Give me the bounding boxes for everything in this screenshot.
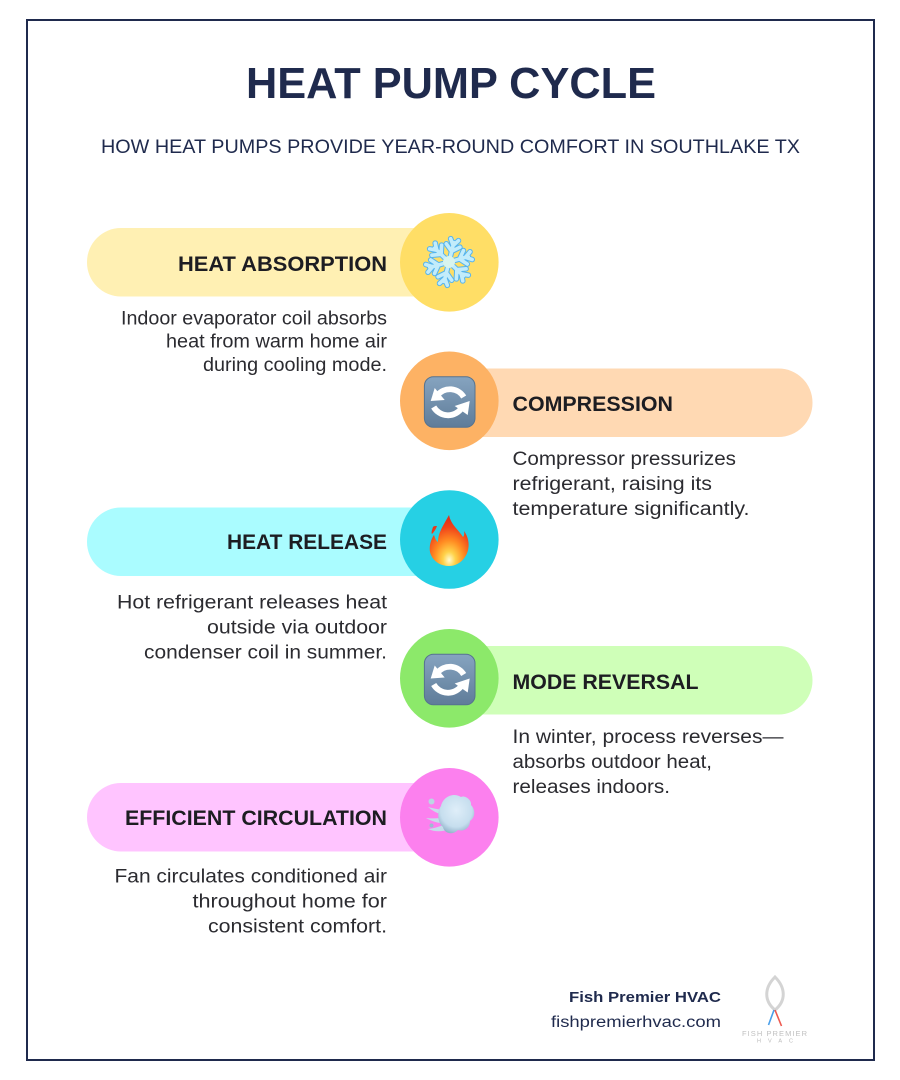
icon: fire	[430, 515, 469, 566]
heat release description: outside via outdoor	[207, 618, 388, 638]
panel: mode reversal	[400, 629, 812, 798]
heat release description: Hot refrigerant releases heat	[117, 592, 388, 614]
efficient circulation description: Fan circulates conditioned air	[114, 866, 388, 888]
logo: FISH PREMIER	[742, 1029, 808, 1038]
efficient circulation description: consistent comfort.	[208, 916, 387, 938]
icon: snowflake	[421, 234, 477, 290]
compression circle	[400, 352, 499, 450]
footer company text	[551, 989, 721, 1031]
heat absorption heading: HEAT ABSORPTION	[178, 253, 387, 276]
logo: HVAC	[757, 1038, 793, 1044]
heat absorption circle	[400, 213, 499, 312]
title: HEAT PUMP CYCLE	[246, 59, 656, 108]
footer company text: Fish Premier HVAC	[569, 989, 721, 1006]
mode reversal circle	[400, 629, 499, 728]
heat release pill	[87, 508, 457, 576]
mode reversal description	[512, 727, 784, 798]
mode reversal pill	[442, 646, 812, 714]
heat absorption pill	[87, 228, 457, 296]
heat absorption description: heat from warm home air	[166, 332, 388, 353]
efficient circulation circle	[400, 768, 499, 867]
panel: heat absorption	[87, 213, 499, 376]
compression description: refrigerant, raising its	[512, 474, 712, 495]
footer company text: fishpremierhvac.com	[551, 1014, 721, 1031]
efficient circulation description	[114, 866, 388, 938]
mode reversal description: In winter, process reverses—	[512, 727, 784, 748]
efficient circulation heading: EFFICIENT CIRCULATION	[125, 807, 387, 830]
logo	[742, 977, 808, 1044]
mode reversal description: absorbs outdoor heat,	[512, 752, 712, 773]
compression pill	[442, 368, 812, 437]
heat release heading: HEAT RELEASE	[227, 531, 387, 554]
mode reversal description: releases indoors.	[512, 777, 670, 798]
heat absorption description: Indoor evaporator coil absorbs	[121, 308, 387, 329]
compression description	[512, 449, 750, 520]
heat release circle	[400, 490, 499, 589]
panel: compression	[400, 352, 812, 520]
heat release description	[117, 592, 388, 664]
heat absorption description: during cooling mode.	[203, 355, 387, 376]
heat release description: condenser coil in summer.	[144, 642, 387, 664]
efficient circulation description: throughout home for	[192, 892, 388, 912]
panel: heat release	[87, 490, 499, 664]
heat absorption description	[121, 308, 388, 376]
icon: refresh arrows	[424, 377, 475, 427]
mode reversal heading: MODE REVERSAL	[512, 671, 699, 694]
icon: refresh arrows	[424, 654, 475, 705]
efficient circulation pill	[87, 783, 457, 852]
subtitle: HOW HEAT PUMPS PROVIDE YEAR-ROUND COMFORT IN SOUTHLAKE TX	[101, 136, 800, 158]
compression heading: COMPRESSION	[512, 393, 673, 416]
compression description: Compressor pressurizes	[512, 449, 736, 470]
panel: efficient circulation	[87, 768, 499, 938]
icon: dash cloud	[426, 795, 474, 833]
compression description: temperature significantly.	[512, 499, 750, 520]
